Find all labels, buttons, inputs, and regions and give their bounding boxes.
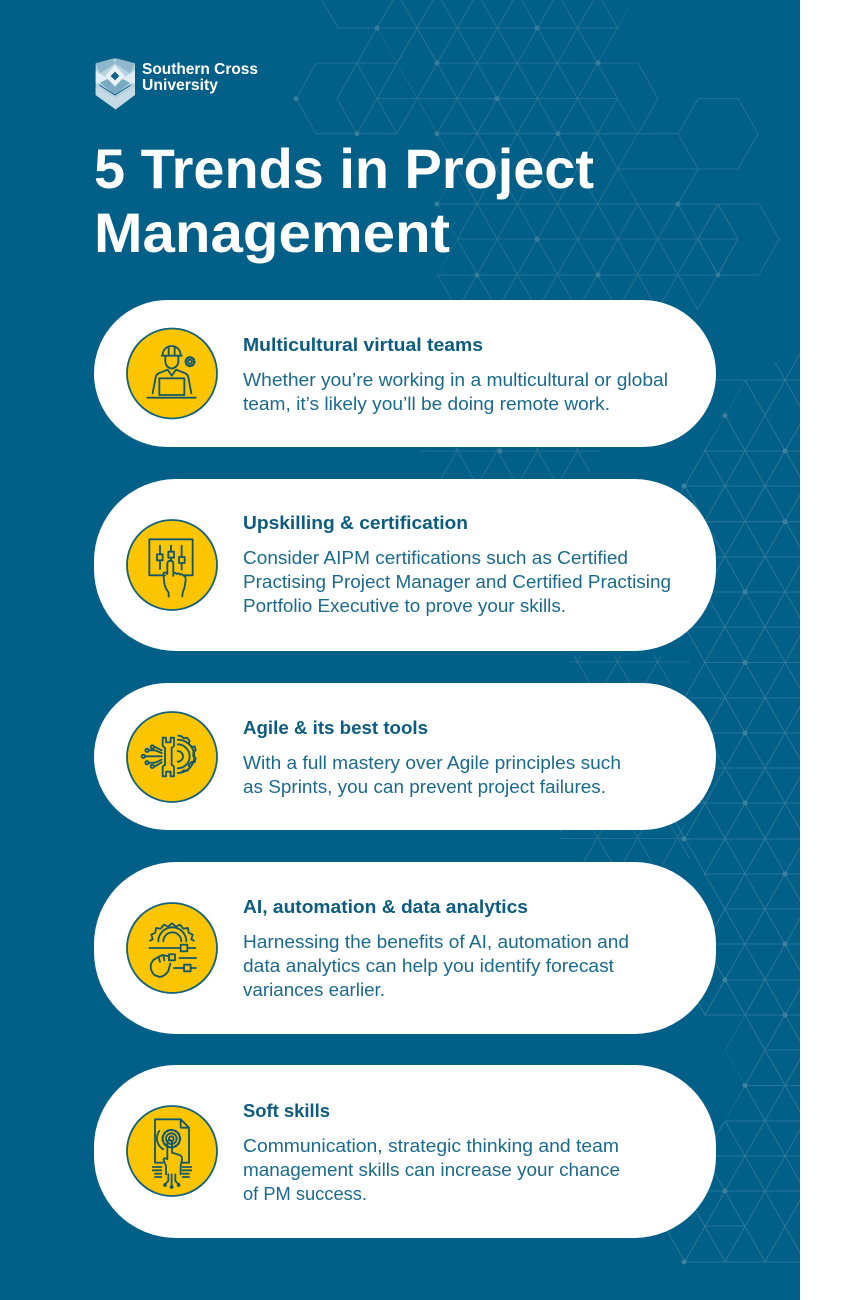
body text: of PM success. <box>243 1183 367 1204</box>
body text: Consider AIPM certifications such as Certified <box>243 547 628 568</box>
panel: agile and its best tools <box>94 683 716 830</box>
body text <box>243 1135 620 1204</box>
body text <box>243 931 629 1000</box>
title <box>94 137 594 264</box>
body text: Practising Project Manager and Certified Practising <box>243 571 671 592</box>
hexagon lattice: middle gaps <box>420 445 690 865</box>
icon: hand adjusting gear sliders <box>127 903 217 993</box>
panel: soft skills <box>94 1065 716 1238</box>
body text <box>243 547 671 616</box>
icon: engineer at laptop <box>127 328 217 418</box>
icon: shield <box>96 58 135 109</box>
body text: data analytics can help you identify forecast <box>243 955 614 976</box>
heading: Agile & its best tools <box>243 717 428 738</box>
logo text: University <box>142 77 218 94</box>
panel: multicultural virtual teams <box>94 300 716 447</box>
heading: Upskilling & certification <box>243 512 468 533</box>
body text: management skills can increase your chance <box>243 1159 620 1180</box>
body text: Communication, strategic thinking and team <box>243 1135 619 1156</box>
body text: Harnessing the benefits of AI, automation and <box>243 931 629 952</box>
body text: team, it’s likely you’ll be doing remote work. <box>243 393 610 414</box>
body text: variances earlier. <box>243 979 385 1000</box>
body text <box>243 752 621 797</box>
panel: AI, automation and data analytics <box>94 862 716 1034</box>
heading: AI, automation & data analytics <box>243 896 528 917</box>
hexagon lattice: top <box>296 0 779 310</box>
logo text <box>142 61 258 94</box>
lattice nodes: top <box>294 26 720 278</box>
heading: Multicultural virtual teams <box>243 334 483 355</box>
icon: wrench and gear <box>127 712 217 802</box>
title: 5 Trends in Project <box>94 137 594 200</box>
hexagon lattice: right band <box>664 345 800 1262</box>
icon: hand pressing sliders <box>127 520 217 610</box>
lattice nodes: right band <box>682 413 788 1265</box>
panel: upskilling and certification <box>94 479 716 651</box>
logo: Southern Cross University <box>96 58 258 109</box>
icon: document gear and hand <box>127 1106 217 1196</box>
body text: as Sprints, you can prevent project failures. <box>243 776 606 797</box>
title: Management <box>94 201 450 264</box>
body text: Whether you’re working in a multicultural or global <box>243 369 668 390</box>
body text: Portfolio Executive to prove your skills. <box>243 595 566 616</box>
logo text: Southern Cross <box>142 61 258 78</box>
body text <box>243 369 668 414</box>
heading: Soft skills <box>243 1100 330 1121</box>
body text: With a full mastery over Agile principles such <box>243 752 621 773</box>
